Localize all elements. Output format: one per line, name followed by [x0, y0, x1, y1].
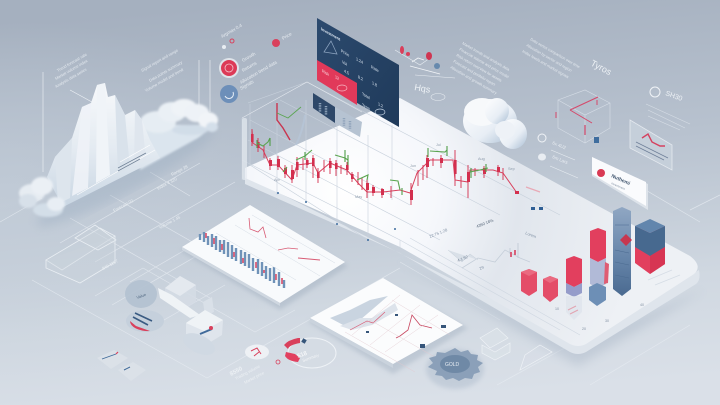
center-left glass blocks: Value [136, 292, 147, 300]
panel text: Rate [371, 64, 379, 74]
small data tiles [313, 93, 362, 137]
bottom text block: Trading volume [234, 363, 261, 381]
panel text: 4.5 [344, 68, 350, 76]
bar 2 [543, 276, 558, 302]
ring gauge: Summary [302, 352, 319, 363]
top-right text block: Allocation and growth summary [450, 65, 497, 95]
ring gauge [284, 338, 336, 368]
axis labels: Jun [410, 164, 416, 168]
panel text: Price [341, 48, 350, 58]
right labels with icons: 6m Lars [552, 154, 569, 165]
top-right text block: Risk return overview for assets [456, 53, 503, 83]
icon labels [220, 23, 293, 91]
platform mini charts: 4350 16% [476, 217, 494, 229]
top-right text block: Allocation by sector and region [526, 43, 572, 73]
clock icon with label: SH30 [664, 90, 683, 103]
clock icon with label [646, 87, 690, 130]
axis labels: May [355, 195, 362, 199]
floor module labels: Range 28 [170, 164, 189, 177]
bottom text block: 8550 [229, 366, 244, 378]
panel text: 1.2 [378, 101, 384, 109]
top-right text block: Data series comparison over time [530, 37, 580, 69]
top-left text block: Trend forecast rate [56, 51, 88, 73]
icon labels: Allocation trend data [239, 59, 278, 85]
top-left text block: Signal report and range [140, 47, 179, 73]
icon labels: Returns [241, 60, 258, 73]
platform mini charts: 29 [479, 264, 485, 271]
floor module labels [101, 164, 189, 271]
brand tag card: Investment [611, 181, 626, 191]
wireframe cube chart [556, 90, 610, 143]
platform mini charts: 4.1 52 [457, 254, 469, 263]
axis labels: Sep [508, 167, 515, 171]
top-left text block: Data points summary [148, 60, 183, 83]
layered disc [126, 310, 164, 332]
floor module labels: Volume 1 45 [158, 214, 182, 230]
icon: red badge [219, 58, 239, 78]
panel text: Risk [322, 68, 330, 78]
icon: blue badge [220, 85, 238, 103]
base labels: 10 [555, 307, 559, 311]
cloud left [19, 177, 65, 217]
panel text: Investment [321, 26, 341, 42]
base labels: 20 [582, 327, 586, 331]
dark dashboard panel [317, 18, 399, 127]
axis labels: Aug [478, 157, 485, 161]
right cloud [463, 98, 527, 149]
base labels: 30 [605, 319, 609, 323]
small disc icon [245, 344, 280, 364]
icon labels: Growth [241, 51, 257, 63]
green line [257, 138, 488, 190]
panel text: 8.2 [358, 74, 364, 82]
top-left text block: Analysis data series [54, 67, 87, 89]
platform mini charts [429, 187, 543, 271]
top-left text block: Market volume index [54, 58, 88, 81]
glass red chart tile [630, 120, 672, 170]
panel text [321, 26, 384, 112]
gear icon [426, 348, 484, 389]
heading: Tyros: Tyros [589, 58, 614, 77]
area bands [330, 296, 388, 326]
floor module labels: Forecast 02 [112, 198, 135, 213]
platform mini charts: Lorem [525, 230, 538, 239]
ring gauge: $18 [297, 351, 309, 360]
base labels: 40 [640, 303, 644, 307]
icon column with labels [219, 23, 293, 103]
panel text: Vol [342, 59, 347, 67]
right labels with icons: 6x 4U2 [552, 140, 567, 150]
axis labels: Jul [436, 143, 441, 147]
chart markers [277, 192, 396, 241]
main platform [245, 98, 705, 366]
chart card: bars and lines [180, 205, 348, 310]
bar 3 [566, 256, 582, 320]
bottom text block: Market price [243, 370, 266, 385]
cloud ridge right [140, 99, 218, 170]
chart card: area and line [308, 278, 468, 374]
bottom text block [229, 363, 266, 385]
bar 4 [589, 228, 609, 306]
floor module labels: 840 1287 [101, 258, 119, 271]
top-right text block: Financial volume and price model [458, 47, 510, 79]
brand tag card [592, 157, 648, 210]
panel text: 12 [335, 74, 340, 82]
mountain data chart with clouds [19, 60, 220, 237]
red bodies [251, 134, 519, 200]
top-right text block: Index levels and market signals [522, 49, 569, 79]
axis labels [274, 143, 515, 199]
chart area: candlesticks [242, 82, 560, 241]
panel text: Total [362, 91, 370, 100]
small note tiles [97, 350, 146, 381]
brand tag card: Nuthemi [610, 173, 631, 187]
center-left glass blocks [125, 276, 223, 359]
top-left text block: Volume model and trend [144, 67, 184, 93]
icon labels: Argmax 0.4 [220, 23, 243, 39]
icon labels: Signals [239, 79, 255, 91]
panel text: Term [362, 102, 371, 112]
axis labels: Apr [274, 178, 281, 182]
right labels with icons [538, 134, 578, 178]
panel text: 1.8 [372, 80, 378, 88]
floor grid lines [0, 163, 720, 385]
top-right text block: Forecast and portfolio report [452, 59, 497, 87]
top-right text block: Market trends and analysis data [462, 41, 511, 72]
glass cube module [480, 328, 552, 370]
floor module: isometric outline [46, 225, 116, 283]
icon: small red marker [222, 39, 280, 49]
panel text: 1.24 [356, 56, 364, 65]
base labels [555, 303, 644, 331]
bar 6 [635, 219, 665, 274]
red wicks [252, 129, 503, 205]
card lines [249, 218, 266, 238]
icon labels: Price [281, 31, 293, 41]
gear icon: GOLD [445, 362, 460, 368]
mountain callouts [43, 60, 210, 195]
bar 1 [521, 269, 537, 296]
top mini diagram [395, 46, 455, 100]
chart grid box [242, 82, 560, 240]
bar 5 tower [613, 207, 632, 296]
red line [252, 130, 517, 193]
upper line [277, 103, 290, 140]
3D bar chart [521, 207, 680, 331]
floor module labels: Index 4 320 [156, 176, 178, 191]
card bars [200, 232, 284, 288]
platform mini charts: 22.75 1.28 [429, 227, 449, 239]
red section [317, 60, 357, 105]
mountain [47, 83, 160, 207]
top mini diagram: Hqs [414, 82, 432, 95]
top-left text block [54, 47, 184, 93]
top-right text block [450, 37, 580, 95]
